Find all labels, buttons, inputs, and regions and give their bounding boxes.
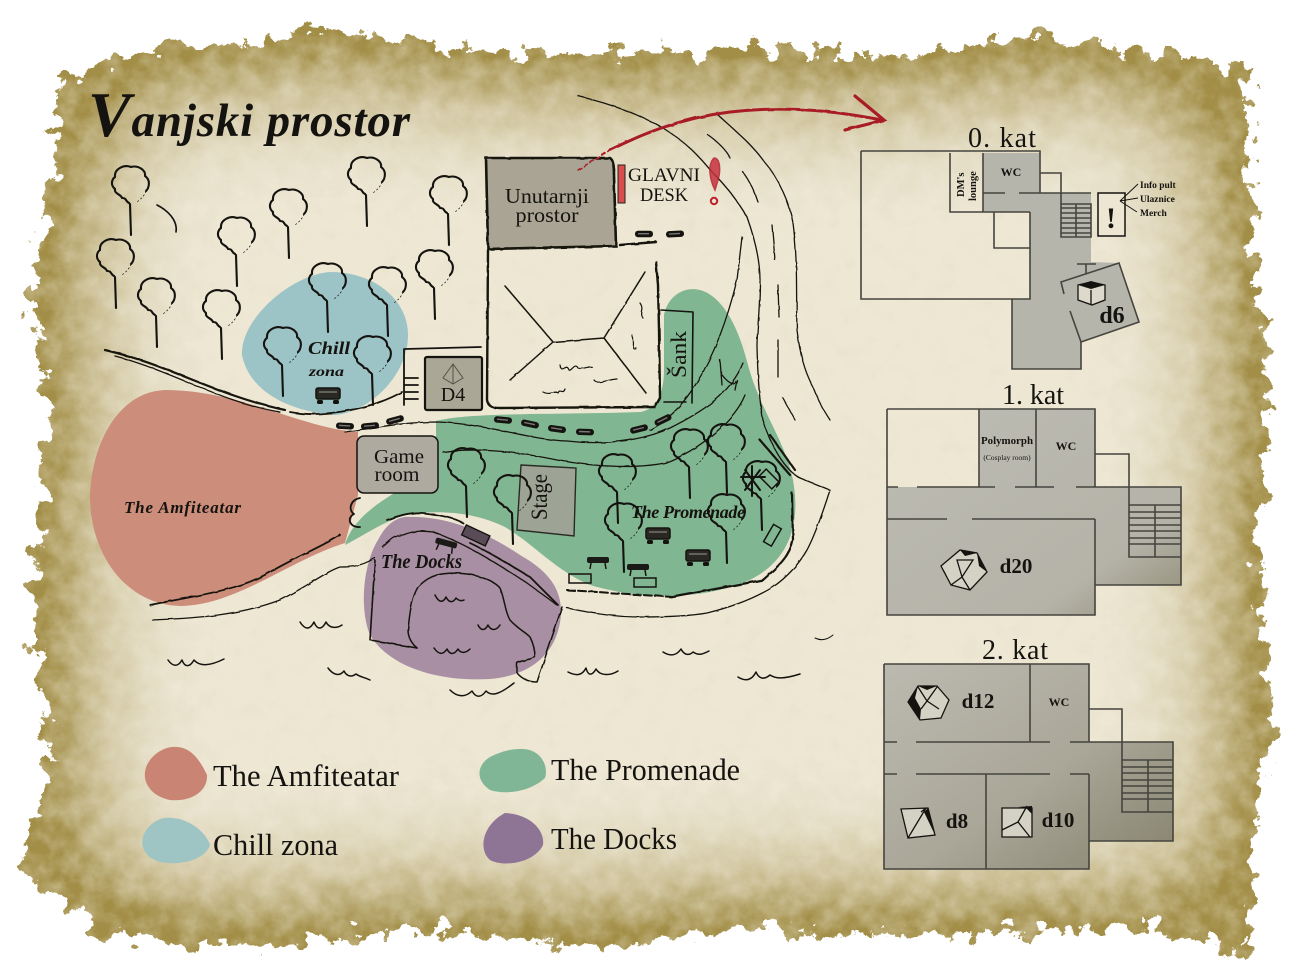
game room: Game: [374, 446, 424, 468]
main building: [486, 158, 660, 408]
furniture: [316, 388, 781, 587]
stairs: [1061, 193, 1091, 237]
legend: The Docks: [483, 813, 677, 864]
walls: [884, 664, 1173, 869]
d20 icon and label: [941, 550, 1032, 590]
cars: [336, 230, 684, 436]
legend: The Amfiteatar: [145, 747, 400, 800]
zone labels: [124, 338, 745, 573]
unutarnji prostor block: [486, 158, 616, 249]
d4 room: D4: [441, 384, 465, 406]
game room: [357, 436, 438, 493]
info labels: Info pult: [1140, 181, 1176, 191]
legend: The Promenade: [479, 749, 740, 792]
zone: The Promenade: [345, 289, 795, 596]
waves: [168, 595, 833, 696]
zone labels: The Amfiteatar: [124, 498, 241, 517]
stairs: [1122, 742, 1173, 812]
heading: 2. kat: 2. kat: [982, 635, 1048, 666]
title: Vanjski prostor: [88, 79, 411, 150]
legend: The Promenade: The Promenade: [551, 752, 740, 787]
heading: 0. kat: 0. kat: [968, 123, 1036, 154]
d8 icon and label: d8: [946, 809, 968, 833]
grey rooms: [887, 409, 1181, 615]
d12 icon and label: d12: [962, 689, 994, 713]
game room: room: [374, 464, 420, 486]
sank bar: Šank: [666, 331, 691, 378]
info labels: Merch: [1140, 209, 1167, 219]
info labels: [1140, 181, 1176, 219]
floor plan: 0. kat: [861, 123, 1176, 369]
zone: The Amfiteatar: [90, 390, 358, 606]
icon: red exclamation: [710, 158, 720, 204]
zone labels: Chill: [308, 338, 350, 358]
zone labels: The Promenade: [631, 502, 745, 522]
label: wc: WC: [1001, 165, 1021, 179]
sank bar: [661, 310, 693, 403]
d10 icon and label: d10: [1042, 808, 1074, 832]
floor plan: 2. kat: [884, 635, 1173, 869]
floor plan: 1. kat: [887, 380, 1181, 615]
d20 icon and label: d20: [1000, 554, 1032, 578]
unutarnji prostor label: Unutarnji: [505, 184, 589, 208]
legend: Chill zona: [142, 818, 338, 863]
d8 icon and label: [901, 808, 968, 838]
legend: Chill zona: Chill zona: [213, 827, 338, 862]
heading: 1. kat: 1. kat: [1002, 380, 1064, 411]
d6 icon and label: d6: [1099, 303, 1125, 329]
icon: info desk: !: [1106, 202, 1116, 235]
zone labels: The Docks: [381, 551, 462, 573]
trees: [97, 157, 780, 572]
icon: info desk: [1098, 184, 1138, 236]
d12 icon and label: [908, 686, 994, 720]
legend: The Amfiteatar: The Amfiteatar: [213, 758, 400, 793]
floor plan: 1. kat: (Cosplay room): [983, 453, 1031, 462]
zone: Chill zona: [242, 272, 408, 415]
roads and shoreline: [105, 96, 830, 682]
map: [90, 96, 884, 696]
grey rooms: [983, 153, 1139, 369]
arrow to floor plans: [578, 96, 884, 170]
glavni desk: DESK: [640, 185, 688, 206]
grey rooms: [884, 664, 1173, 869]
glavni desk: [618, 165, 700, 206]
stairs: [1129, 487, 1181, 557]
zone labels: zona: [308, 365, 344, 380]
label: wc: WC: [1049, 695, 1069, 709]
floor plan: 0. kat: lounge: [968, 171, 979, 201]
stage: [517, 465, 576, 536]
walls: [887, 409, 1181, 615]
glavni desk: GLAVNI: [628, 165, 700, 186]
label: dm's lounge: DM's: [956, 172, 967, 197]
stage: Stage: [527, 474, 552, 520]
walls: [861, 151, 1139, 369]
legend: The Docks: The Docks: [551, 821, 677, 856]
d4 room: [404, 347, 482, 410]
legend: [142, 747, 740, 864]
info labels: Ulaznice: [1140, 195, 1175, 205]
d10 icon and label: [1002, 806, 1074, 837]
label: wc: WC: [1056, 439, 1076, 453]
main building: prostor: [516, 203, 578, 227]
label: polymorph: Polymorph: [981, 436, 1033, 447]
d6 icon and label: [1078, 281, 1125, 329]
building walls and roof: [487, 242, 660, 408]
zone: The Docks: [364, 517, 561, 679]
